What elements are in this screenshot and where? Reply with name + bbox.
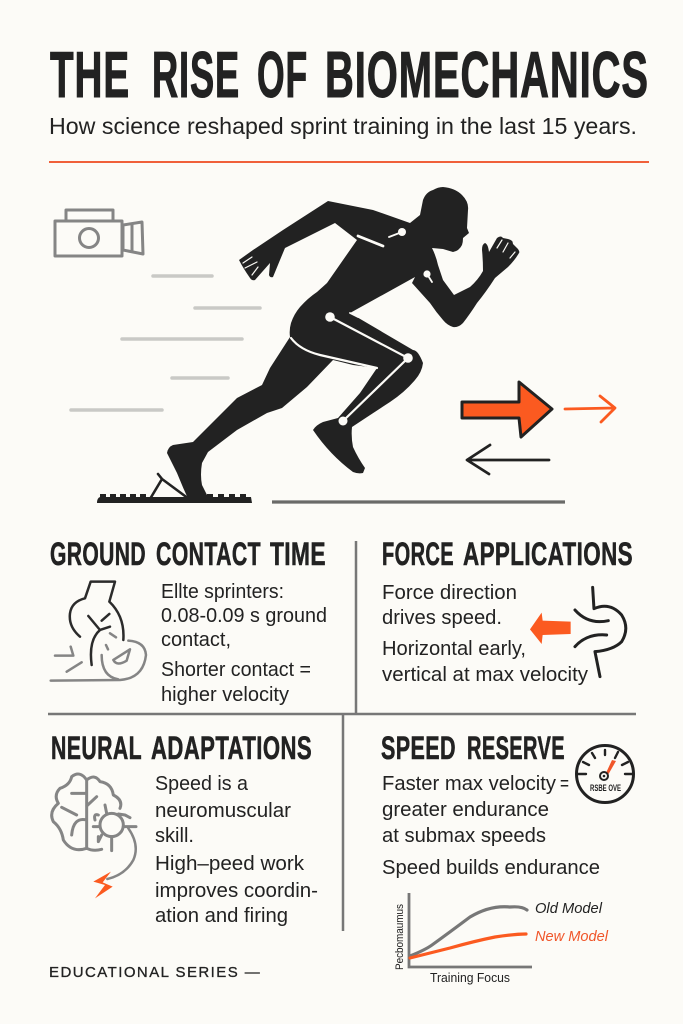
line chart: old vs new model [394,893,609,985]
heading: NEURAL [51,730,142,766]
body text [382,582,588,686]
icon: gauge [576,746,634,802]
body text: High–peed work [155,853,305,875]
legend: old model: Old Model [535,901,603,917]
icon: foot strike [51,582,146,681]
heading [50,536,326,572]
arrow: big orange force [462,382,552,437]
footer label: EDUCATIONAL SERIES — [49,964,261,981]
body text: Speed builds endurance [382,857,600,879]
panel: ground contact time [50,536,327,706]
arrow: black reaction [467,445,549,474]
icon: camera [55,210,143,256]
legend: new model: New Model [535,929,609,945]
heading: SPEED [381,730,456,766]
icon: gauge: RSBE OVE [590,783,621,793]
joint markers [325,228,431,426]
body text: Faster max velocity [382,773,556,795]
runner silhouette [167,187,519,503]
white body lines [291,338,377,368]
heading [381,730,565,766]
finger gaps [243,240,515,275]
body text: skill. [155,825,194,847]
heading [51,730,312,766]
panel: force applications [382,536,633,686]
body text: Shorter contact = [161,659,311,681]
arrow: thin orange [565,396,615,422]
dividers [48,541,636,931]
body text: improves coordin- [155,880,318,902]
title [50,39,649,111]
body text: = [560,773,569,795]
body text: vertical at max velocity [382,664,588,686]
heading: GROUND [50,536,146,572]
body text: contact, [161,629,231,651]
body text: greater endurance [382,799,549,821]
body text: 0.08-0.09 s ground [161,605,327,627]
body text: ation and firing [155,905,288,927]
icon: force arrow and joint [530,587,626,677]
heading: TIME [270,536,326,572]
starting block [97,474,252,503]
body text: Speed is a [155,773,249,795]
heading [382,536,633,572]
body text [155,773,318,927]
body text: Ellte sprinters: [161,581,284,603]
title: RISE [152,39,240,111]
body text: at submax speeds [382,825,546,847]
track line [272,500,565,504]
body text: drives speed. [382,607,502,629]
x axis label: Training Focus [430,971,510,985]
body text: higher velocity [161,684,289,706]
old model curve [410,907,527,956]
body text [161,581,327,706]
y axis label: Pecbomaumus [394,904,406,970]
panel: speed reserve [381,730,634,985]
body text: neuromuscular [155,800,291,822]
body text: Force direction [382,582,517,604]
new model curve [410,934,526,958]
heading: CONTACT [156,536,261,572]
heading: RESERVE [467,730,565,766]
body text [382,773,600,879]
heading: FORCE [382,536,454,572]
icon: brain with nerve [52,774,136,898]
subtitle: How science reshaped sprint training in the last 15 years. [49,113,637,139]
heading: ADAPTATIONS [151,730,312,766]
body text: Horizontal early, [382,638,526,660]
title: OF [257,39,308,111]
hero illustration: sprinter [55,187,615,503]
title: THE [50,39,130,111]
panel: neural adaptations [51,730,318,927]
motion lines [71,276,260,410]
